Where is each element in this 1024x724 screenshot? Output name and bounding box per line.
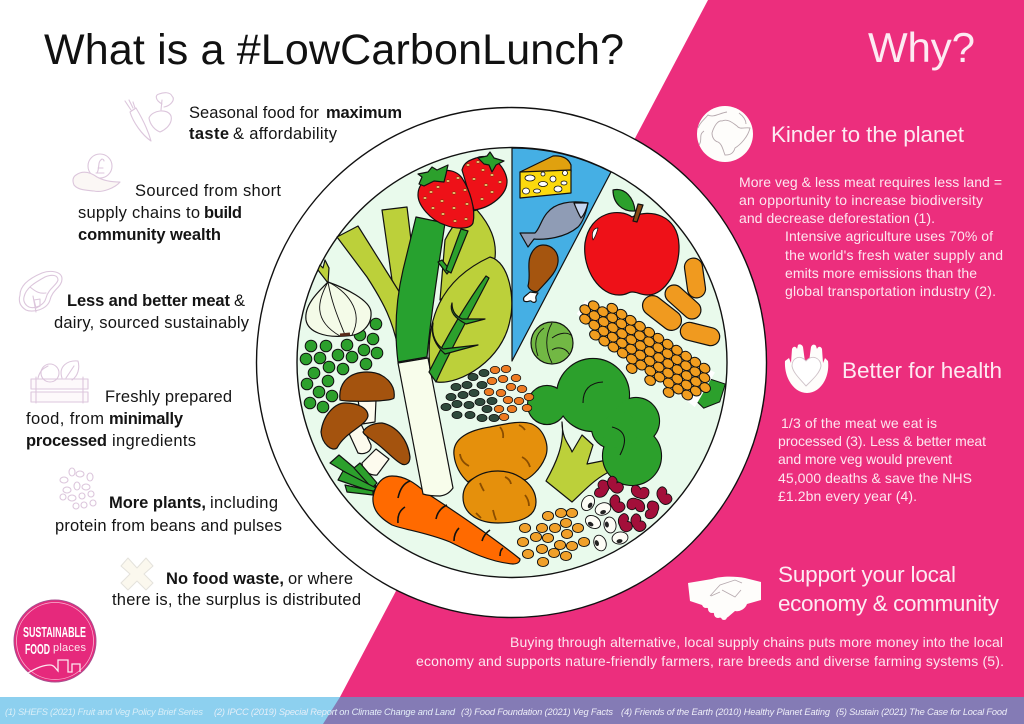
item: more plants: protein from beans and pulses <box>55 517 282 535</box>
section: support your local economy: economy and supports nature-friendly farmers, rare breeds and diverse farming systems (5). <box>416 653 1004 669</box>
peas <box>300 318 383 413</box>
apple <box>585 190 679 295</box>
icon: root vegetables <box>125 93 173 141</box>
section: better for health: Better for health <box>842 358 1002 383</box>
item: freshly prepared: food, from <box>26 410 104 428</box>
logo: sustainable food places: SUSTAINABLE <box>23 624 86 641</box>
item: less and better meat <box>19 271 250 332</box>
strawberry stems <box>438 229 468 274</box>
icon: cross <box>121 558 153 590</box>
footer band: references: (4) Friends of the Earth (2010) Healthy Planet Eating <box>621 707 831 717</box>
leek <box>337 207 453 496</box>
item: freshly prepared: processed <box>26 432 107 450</box>
icon: crate of produce <box>31 361 88 403</box>
icon: steak <box>19 271 62 312</box>
item: seasonal food: Seasonal food for <box>189 104 320 122</box>
kidney beans <box>593 475 674 534</box>
peanuts <box>639 257 722 348</box>
logo: sustainable food places <box>14 600 96 682</box>
item: no food waste <box>112 558 361 609</box>
broccoli <box>528 359 661 502</box>
section: kinder to the planet: an opportunity to increase biodiversity <box>739 192 983 208</box>
icon: beans and pulses <box>60 468 96 509</box>
item: seasonal food <box>125 93 402 143</box>
chicken leg <box>523 245 558 302</box>
item: seasonal food: & affordability <box>233 125 338 143</box>
logo: sustainable food places: FOOD <box>25 641 50 658</box>
heading: why: Why? <box>868 24 975 71</box>
item: short supply chains: build <box>204 204 242 222</box>
item: freshly prepared: ingredients <box>112 432 196 450</box>
section: support your local economy: economy & community <box>778 591 1000 616</box>
section: better for health: and more veg would prevent <box>778 451 952 467</box>
section: better for health <box>778 344 1002 504</box>
potatoes <box>454 422 547 523</box>
item: more plants <box>55 468 282 535</box>
item: freshly prepared <box>26 361 232 450</box>
corn husk <box>695 376 730 414</box>
section: better for health: 45,000 deaths & save the NHS <box>778 470 972 486</box>
item: more plants: including <box>210 494 278 512</box>
spinach leaf back <box>440 210 495 300</box>
panel: pink why background <box>340 0 1024 697</box>
mushrooms <box>321 372 410 475</box>
section: better for health: £1.2bn every year (4). <box>778 488 917 504</box>
item: less and better meat: & <box>234 292 245 310</box>
fish <box>520 202 588 247</box>
item: seasonal food: taste <box>189 125 229 143</box>
carrot <box>330 455 520 564</box>
section: better for health: processed (3). Less & better meat <box>778 433 986 449</box>
cheese <box>520 156 571 198</box>
item: freshly prepared: minimally <box>109 410 184 428</box>
section: support your local economy: Buying through alternative, local supply chains puts more money into the local <box>510 634 1003 650</box>
white beans <box>579 493 629 553</box>
chickpeas <box>517 508 590 567</box>
item: no food waste: there is, the surplus is distributed <box>112 591 361 609</box>
item: more plants: More plants, <box>109 494 206 512</box>
section: support your local economy <box>416 562 1004 669</box>
protein wedge <box>512 148 611 361</box>
footer band: references: (5) Sustain (2021) The Case for Local Food <box>836 707 1008 717</box>
section: kinder to the planet <box>697 106 1003 299</box>
item: short supply chains: community wealth <box>78 226 221 244</box>
section: kinder to the planet: More veg & less meat requires less land = <box>739 174 1002 190</box>
section: kinder to the planet: global transportation industry (2). <box>785 283 996 299</box>
section: kinder to the planet: emits more emissions than the <box>785 265 977 281</box>
item: less and better meat: Less and better meat <box>67 292 230 310</box>
logo: sustainable food places: places <box>53 642 86 654</box>
item: short supply chains <box>73 154 281 244</box>
icon: globe <box>697 106 753 162</box>
spinach leaf front <box>429 257 512 382</box>
corn <box>565 289 733 422</box>
plate rim <box>256 108 766 618</box>
section: support your local economy: Support your local <box>778 562 956 587</box>
front strawberry <box>418 165 474 228</box>
item: less and better meat: dairy, sourced sustainably <box>54 314 250 332</box>
item: short supply chains: supply chains to <box>78 204 200 222</box>
section: kinder to the planet: Intensive agriculture uses 70% of <box>785 228 993 244</box>
footer band: references: (3) Food Foundation (2021) Veg Facts <box>461 707 613 717</box>
item: freshly prepared: Freshly prepared <box>105 388 232 406</box>
section: kinder to the planet: and decrease deforestation (1). <box>739 210 935 226</box>
icon: hands holding heart <box>785 344 828 393</box>
footer band: references: (1) SHEFS (2021) Fruit and Veg Policy Brief Series <box>5 707 203 717</box>
plate <box>256 108 766 618</box>
back strawberry <box>462 152 507 210</box>
footer band: references <box>0 697 1024 724</box>
title: What is a #LowCarbonLunch? <box>44 26 624 74</box>
section: better for health: 1/3 of the meat we eat is <box>781 415 937 431</box>
footer band: references: (2) IPCC (2019) Special Report on Climate Change and Land <box>214 707 456 717</box>
item: no food waste: or where <box>288 570 353 588</box>
item: no food waste: No food waste, <box>166 570 284 588</box>
item: seasonal food: maximum <box>326 104 402 122</box>
lentils <box>441 365 534 422</box>
strawberries <box>418 152 507 228</box>
plate inner <box>297 148 727 578</box>
brussels sprout <box>531 322 573 364</box>
section: kinder to the planet: Kinder to the planet <box>771 122 965 147</box>
garlic <box>306 260 371 336</box>
icon: handshake <box>688 577 761 620</box>
section: kinder to the planet: the world's fresh water supply and <box>785 247 1003 263</box>
icon: hand with coin <box>73 154 120 191</box>
item: short supply chains: Sourced from short <box>135 182 281 200</box>
